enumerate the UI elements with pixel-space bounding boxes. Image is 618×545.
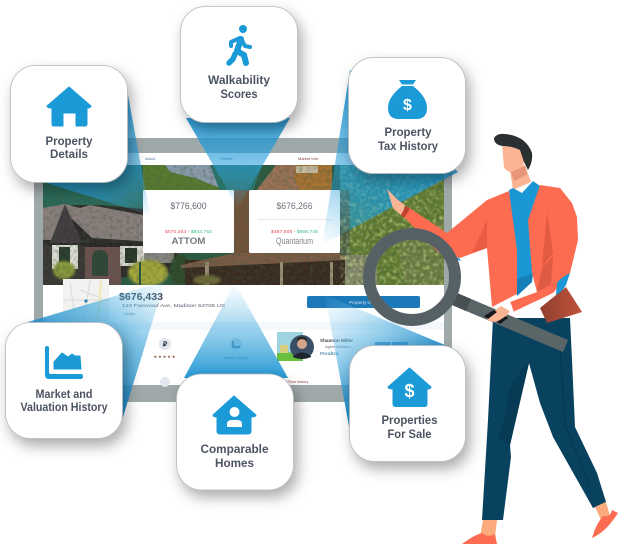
site navigation bar: Market Info [298,156,319,161]
shirt [509,181,540,296]
card: Market and Valuation History [6,322,122,438]
pointing hand [387,189,410,218]
beam: tax history [322,70,458,245]
gripping hand [484,301,514,324]
label: Property Details [46,134,93,161]
icon: walking person [229,25,250,63]
action button: Property Info [349,300,375,305]
label: Comparable Homes: Comparable [200,442,269,456]
magnifier ring [369,234,455,320]
icon: money bag: $ [403,97,412,114]
label: Property Details: Property [46,134,93,148]
price card: ATTOM: $776,600 [170,201,206,211]
action button [307,296,420,308]
site navigation bar: Homes [220,156,233,161]
label: Market and Valuation History [20,387,108,414]
beam: property details [30,90,150,215]
label: Market and Valuation History: Market and [36,387,92,401]
card: Property Details [10,66,128,182]
head [494,134,532,172]
label: Property Tax History [378,125,438,153]
illustration: man with magnifier [369,134,618,544]
agent card: Shannon Miller [320,338,353,343]
stat icon one: ★★★★★ [154,354,176,359]
stat icon two [224,338,248,360]
price card: ATTOM [143,190,234,253]
magnifier handle [452,293,568,352]
stat icon one: ₽ [163,340,168,348]
foliage highlights [340,165,444,285]
label: Market and Valuation History: Valuation History [20,400,108,414]
beam: properties for sale [325,295,452,432]
jacket hem [540,287,582,323]
stat icon three [160,377,309,387]
agent card: Realtor [320,351,340,356]
stat icon one [154,338,176,359]
label: Walkability Scores: Scores [220,87,258,101]
foliage texture [43,165,444,285]
right jacket panel and forearm [510,185,578,312]
hero photo of houses [43,165,444,286]
left foot and shoe [462,520,497,544]
monitor frame [34,138,452,402]
left jacket panel and pointing arm [402,191,517,307]
label: Comparable Homes: Homes [215,456,254,470]
price card: Quantarium [249,190,340,253]
label: Properties For Sale: Properties [382,413,438,427]
label: Properties For Sale: For Sale [388,427,432,441]
site navigation bar: About [145,156,156,161]
light beams from cards to screen [28,70,458,432]
sleeve underside [438,252,461,261]
icon: house [47,87,91,126]
card: Properties For Sale [350,346,466,462]
label: Properties For Sale [382,413,438,441]
icon: area chart [45,346,83,379]
price card: ATTOM: ATTOM [172,236,206,247]
price card: ATTOM: $670,563 - $843,763 [165,229,212,234]
price card: Quantarium: $487,508 - $868,745 [271,229,318,234]
label: Walkability Scores: Walkability [208,73,270,87]
icon: house with dollar: $ [404,381,415,401]
right foot and shoe [592,502,618,538]
trousers [482,318,606,520]
beam: walkability [186,118,290,208]
beam: comparable homes [184,283,288,378]
neck [510,165,531,190]
map thumbnail [63,279,109,321]
label: Walkability Scores [208,73,270,101]
card: Property Tax History [348,58,466,174]
icon: house with person [213,396,256,434]
card: Walkability Scores [180,6,298,122]
info band [43,322,444,330]
label: Property Tax History: Tax History [378,139,438,153]
shrubs [53,261,75,279]
label: Property Details: Details [50,147,88,161]
label: Property Tax History: Property [384,125,432,139]
price and address: $676,433 [119,291,163,303]
stat icon three: Price history [288,380,309,384]
label: Comparable Homes [200,442,269,470]
card: Comparable Homes [176,374,294,490]
property summary section [43,279,444,387]
price card: Quantarium: Quantarium [276,236,313,246]
right house [256,165,300,190]
price and address: Details [124,312,135,316]
screen page background [43,153,444,385]
stat icon two: Market History [224,356,248,360]
left house [43,205,178,285]
magnifying glass [369,234,568,352]
price and address [119,291,225,316]
beam: market history [28,281,165,420]
price and address: 123 Fairwood Ave, Madison 53705 US [122,303,225,308]
price card: Quantarium: $676,266 [276,201,312,211]
monitor mockup [34,138,452,402]
agent card [277,331,408,362]
site navigation bar [145,156,319,161]
agent card: Agent Madison [325,345,351,349]
